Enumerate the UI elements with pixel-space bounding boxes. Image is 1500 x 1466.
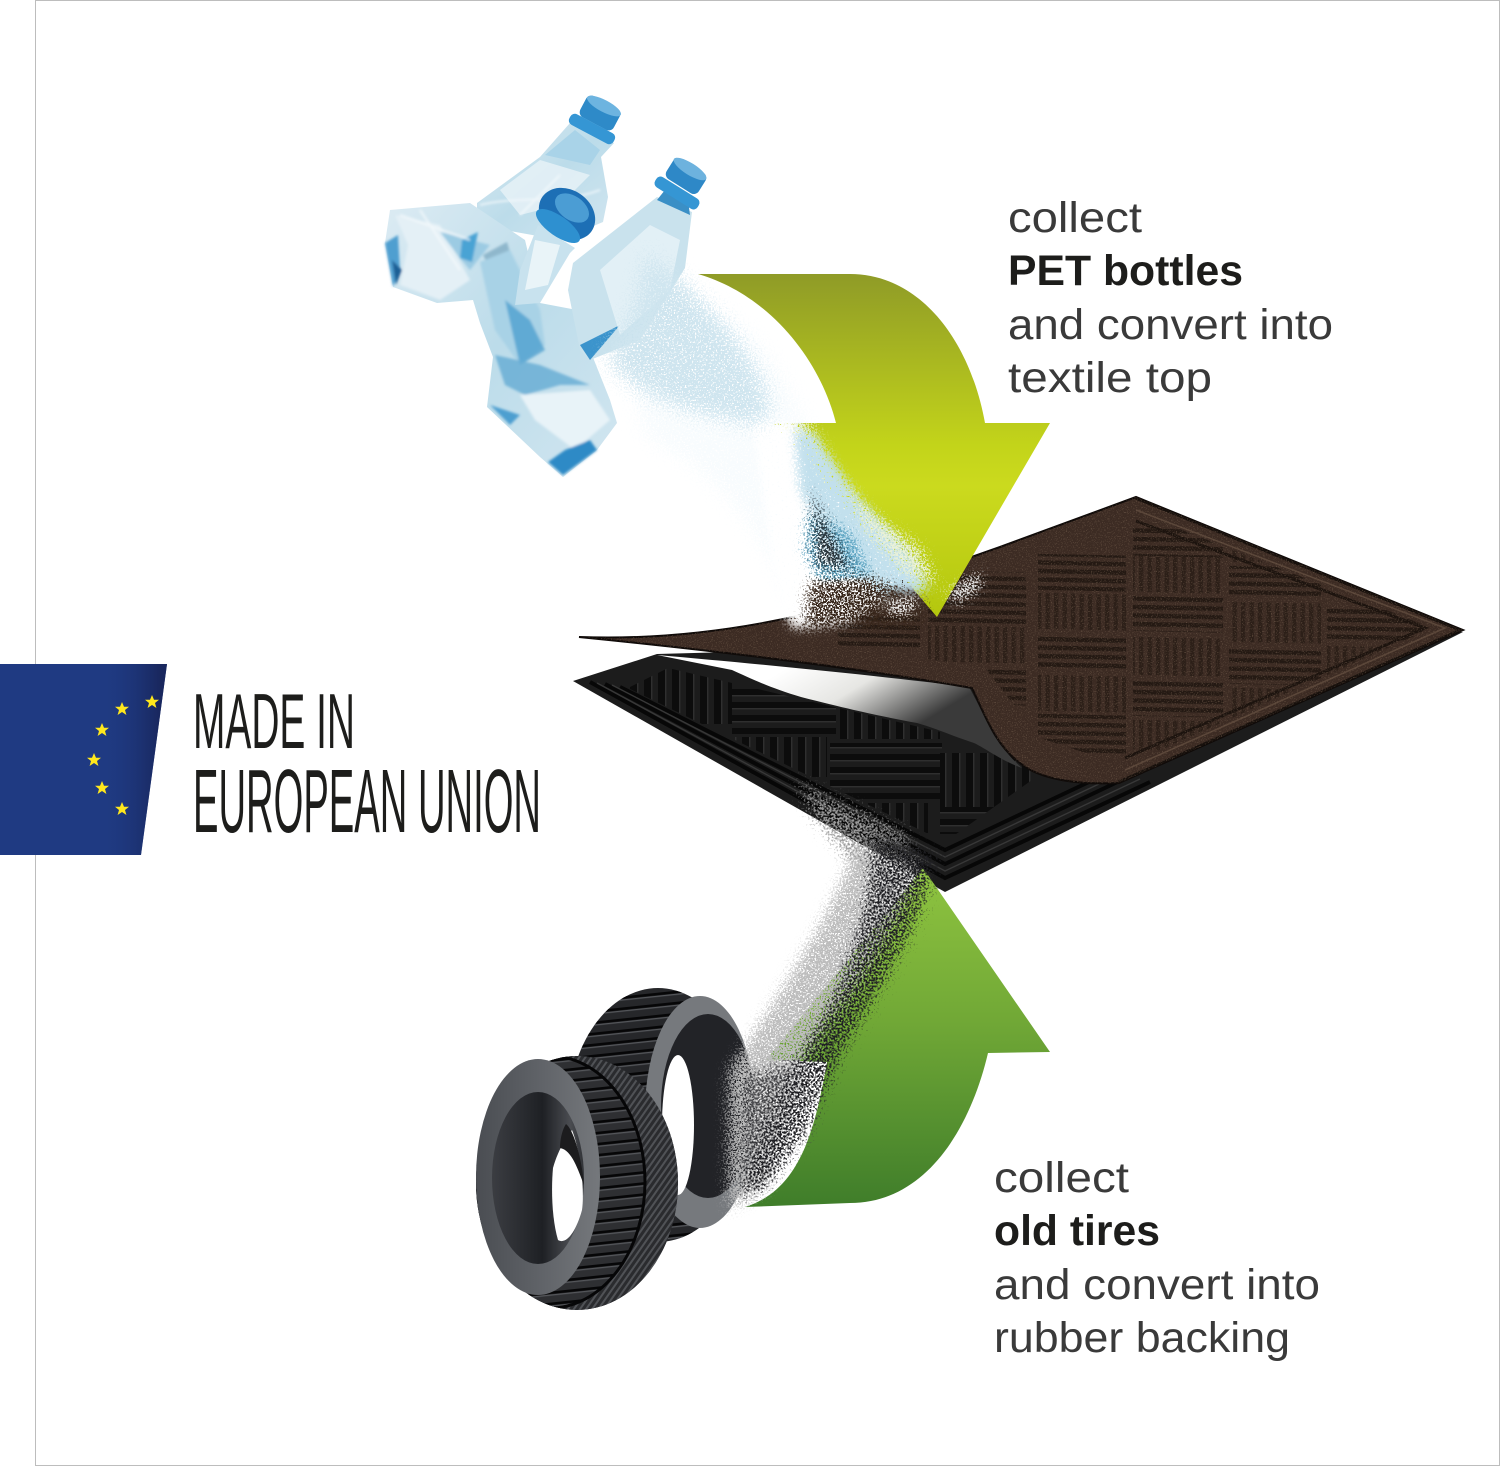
- text: collect PET bottles: textile top: [1008, 354, 1212, 402]
- doormat: rubber backing and brown textile top: [570, 490, 1470, 892]
- blue grains: [800, 505, 880, 590]
- text: collect old tires: rubber backing: [994, 1314, 1290, 1362]
- text: collect old tires: old tires: [994, 1207, 1160, 1255]
- white underside of textile top: [657, 655, 1022, 768]
- brown textile top: [570, 490, 1470, 790]
- bottle: front right dissolving: [568, 154, 709, 360]
- text: collect PET bottles: collect: [1008, 194, 1142, 242]
- rubber dust: dark grains: [738, 830, 945, 1200]
- white dust over arrow: [610, 285, 880, 630]
- front tire: [476, 1056, 678, 1310]
- old tires: [455, 988, 755, 1315]
- brown grains: [800, 572, 930, 632]
- text: collect old tires: and convert into: [994, 1261, 1320, 1309]
- dark grains in spray: [808, 480, 860, 575]
- text: collect PET bottles: and convert into: [1008, 301, 1333, 349]
- white grains on mat: [880, 565, 985, 620]
- green arrow: down into textile top: [698, 274, 1050, 617]
- heading: made in European Union: [193, 677, 541, 852]
- text: collect old tires: collect: [994, 1154, 1129, 1202]
- solid white area left of band: [750, 415, 890, 630]
- rear tire: [568, 988, 755, 1242]
- text: collect old tires: [994, 1154, 1320, 1362]
- bottle: back: [477, 92, 624, 240]
- rubber dust: grey grains near tires: [735, 1050, 828, 1205]
- PET dust: blue and white spray: [610, 285, 985, 632]
- rubber dust: white grey grains: [725, 840, 925, 1215]
- heading: made in European Union: MADE IN: [193, 677, 355, 765]
- rubber dust: light grains over backing: [790, 775, 930, 880]
- PET dust over bottle: [600, 245, 775, 430]
- EU flag: [0, 664, 167, 855]
- black rubber mat base: [573, 632, 1463, 892]
- pale green speckle on arrow edge: [838, 470, 945, 590]
- green arrow: up into rubber backing: [745, 868, 1050, 1207]
- PET bottles: [385, 92, 709, 477]
- pale blue band: [792, 425, 932, 596]
- bottle: middle: [515, 177, 605, 305]
- text: collect PET bottles: [1008, 194, 1333, 402]
- text: collect PET bottles: PET bottles: [1008, 247, 1243, 295]
- bottle: crushed main body: [385, 203, 617, 477]
- text: EUROPEAN UNION: [193, 752, 541, 852]
